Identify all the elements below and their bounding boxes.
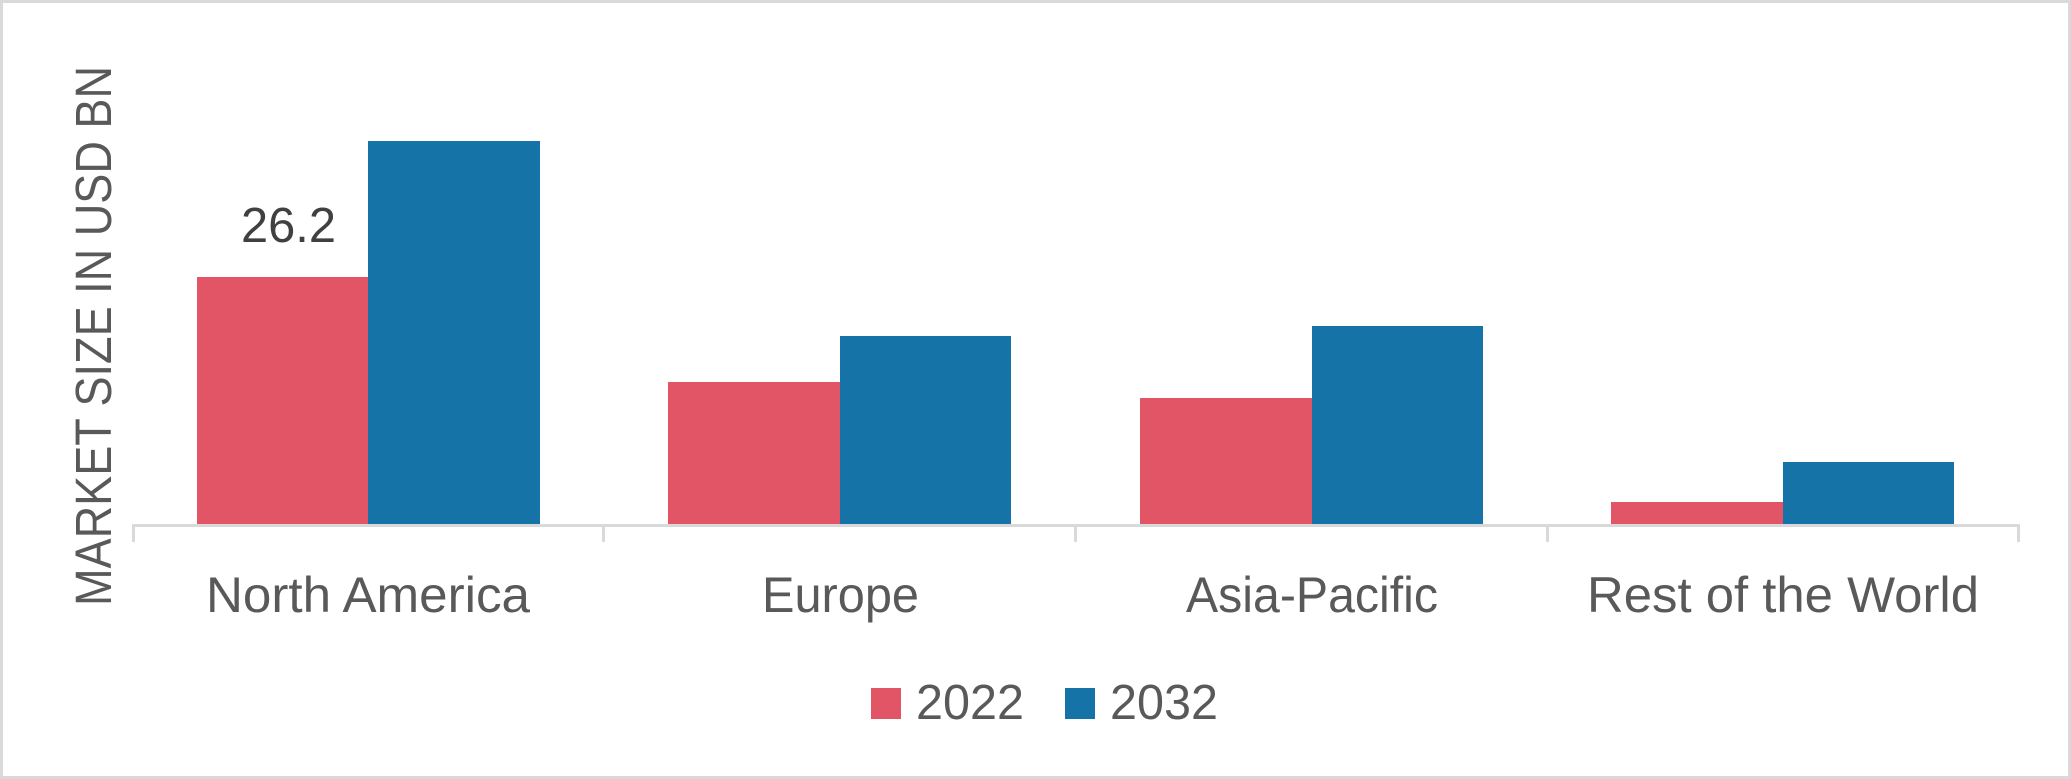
category label: North America: North America [206, 567, 530, 623]
x axis with ticks [132, 524, 2020, 542]
bars: Europe [668, 336, 1011, 524]
legend swatch: 2032 [1065, 688, 1095, 719]
legend label: 2022: 2022 [916, 676, 1024, 730]
y-axis title: MARKET SIZE IN USD BN [65, 66, 122, 606]
data label: North America 2022: 26.2 [241, 199, 336, 253]
category label: Rest of the World: Rest of the World [1587, 567, 1979, 623]
bars: Asia-Pacific [1140, 326, 1483, 524]
category label: Europe: Europe [762, 567, 919, 623]
legend label: 2032: 2032 [1110, 676, 1218, 730]
bars: Rest of the World [1611, 462, 1954, 524]
legend swatch: 2022 [871, 688, 901, 719]
category label: Asia-Pacific: Asia-Pacific [1186, 567, 1438, 623]
legend [871, 676, 1218, 730]
bars: North America [197, 141, 540, 524]
